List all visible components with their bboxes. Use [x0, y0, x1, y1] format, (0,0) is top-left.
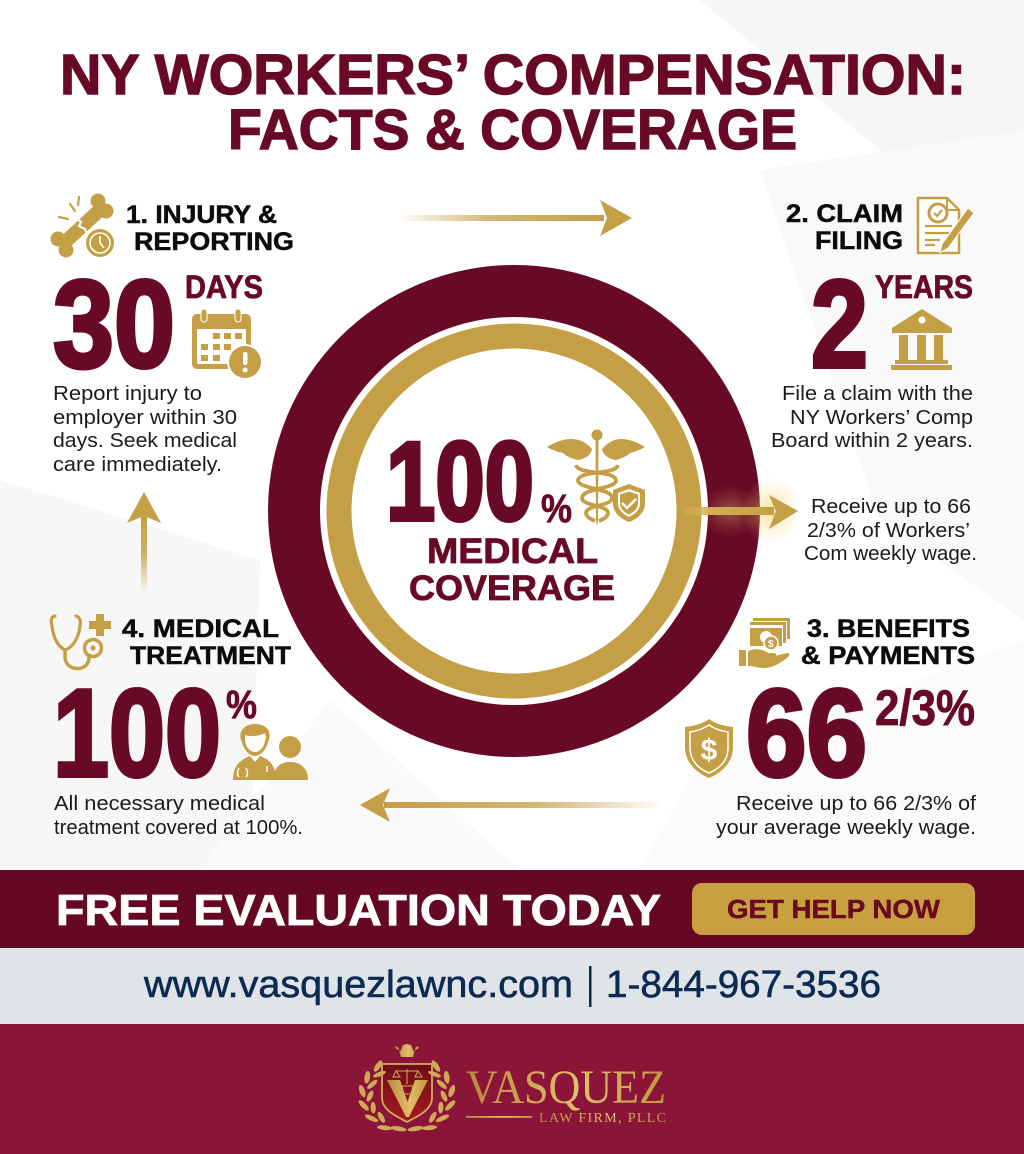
heading: & PAYMENTS — [801, 642, 975, 670]
stat: 30 days: DAYS — [185, 269, 263, 305]
label: COVERAGE — [409, 569, 615, 608]
icon: courthouse — [891, 309, 952, 370]
text block: All necessary medical — [54, 792, 265, 815]
step 1: injury and reporting — [50, 194, 294, 476]
centre stat: 100% medical coverage — [386, 419, 645, 608]
heading: FREE EVALUATION TODAY — [56, 886, 661, 935]
text block: days. Seek medical — [53, 429, 237, 452]
number: 100 — [386, 419, 534, 544]
icon: dollar shield — [685, 719, 733, 778]
contact bar: www.vasquezlawnc.com — [143, 964, 573, 1006]
shield — [382, 1064, 432, 1122]
heading: TREATMENT — [130, 642, 291, 670]
icon: dollar shield: $ — [701, 734, 718, 767]
label — [409, 532, 615, 608]
heading: REPORTING — [134, 228, 294, 256]
wreath — [357, 1059, 457, 1132]
text block: Receive up to 66 2/3% of — [736, 792, 976, 815]
arrow: ring to weekly wage note — [682, 477, 802, 545]
arrow: step 1 to step 2 — [398, 200, 632, 236]
title: NY WORKERS’ COMPENSATION: — [60, 43, 966, 107]
stat: 2 years: 2 — [811, 256, 868, 394]
text block: Board within 2 years. — [771, 429, 973, 452]
number: % — [541, 487, 572, 531]
stat: 2 years — [811, 256, 973, 394]
logo: wordmark: LAW FIRM, PLLC — [539, 1111, 666, 1126]
title: FACTS & COVERAGE — [228, 98, 797, 162]
text block: your average weekly wage. — [716, 816, 976, 839]
text block — [771, 382, 973, 452]
footer band — [0, 1024, 1024, 1154]
stat: 2 years: YEARS — [875, 269, 973, 305]
stat: 66 2/3%: 66 — [746, 665, 867, 803]
background — [0, 0, 1024, 870]
logo: wordmark: VASQUEZ — [466, 1061, 666, 1114]
text block — [53, 382, 237, 476]
icon: stethoscope and plus — [51, 614, 111, 669]
text block: employer within 30 — [53, 406, 237, 429]
step 4: medical treatment — [51, 614, 308, 839]
text block: treatment covered at 100%. — [54, 816, 303, 839]
heading: 4. MEDICAL — [122, 615, 279, 643]
icon: broken bone and clock — [50, 194, 116, 259]
left wreath — [357, 1059, 407, 1132]
heading: FILING — [815, 227, 903, 255]
title — [60, 43, 966, 162]
icon: money and hand — [739, 618, 790, 668]
logo: crest — [357, 1044, 457, 1132]
central ring — [268, 265, 760, 757]
heading — [122, 615, 291, 670]
callout: weekly wage: 2/3% of Workers’ — [807, 519, 970, 542]
stat: 66 2/3% — [746, 665, 975, 803]
heading — [126, 201, 294, 256]
icon: calendar alert — [192, 309, 263, 380]
heading: 1. INJURY & — [126, 201, 277, 229]
arrow: step 4 to step 1 — [127, 492, 161, 592]
step 3: benefits and payments — [685, 615, 976, 839]
icon: caduceus and shield — [547, 430, 645, 526]
icon: document and pen — [918, 198, 974, 253]
stat: 30 days: 30 — [53, 256, 175, 394]
stat: 100%: % — [226, 683, 257, 727]
icon: doctor and patient — [233, 724, 308, 780]
button — [692, 883, 975, 935]
contact bar: 1-844-967-3536 — [606, 964, 881, 1006]
label: MEDICAL — [427, 532, 598, 571]
stat: 66 2/3%: 2/3% — [875, 680, 975, 736]
callout: weekly wage: Receive up to 66 — [811, 495, 971, 518]
icon: money and hand: $ — [768, 639, 774, 650]
stat: 100%: 100 — [53, 665, 221, 803]
text block: care immediately. — [53, 453, 222, 476]
callout: weekly wage — [804, 495, 977, 565]
text block: File a claim with the — [782, 382, 973, 405]
callout: weekly wage: Com weekly wage. — [804, 542, 977, 565]
text block — [54, 792, 303, 839]
right wreath — [407, 1059, 457, 1132]
stat: 30 days — [53, 256, 263, 394]
heading — [786, 200, 903, 255]
contact bar — [0, 948, 1024, 1024]
step 2: claim filing — [771, 198, 974, 452]
heading — [801, 615, 975, 670]
banner: free evaluation — [0, 870, 1024, 948]
crown — [395, 1044, 419, 1057]
text block: Report injury to — [53, 382, 202, 405]
heading: 3. BENEFITS — [807, 615, 970, 643]
text block: NY Workers’ Comp — [790, 406, 973, 429]
text block — [716, 792, 976, 839]
arrow: step 3 to step 4 — [360, 788, 664, 822]
button: GET HELP NOW — [727, 894, 940, 924]
heading: 2. CLAIM — [786, 200, 903, 228]
